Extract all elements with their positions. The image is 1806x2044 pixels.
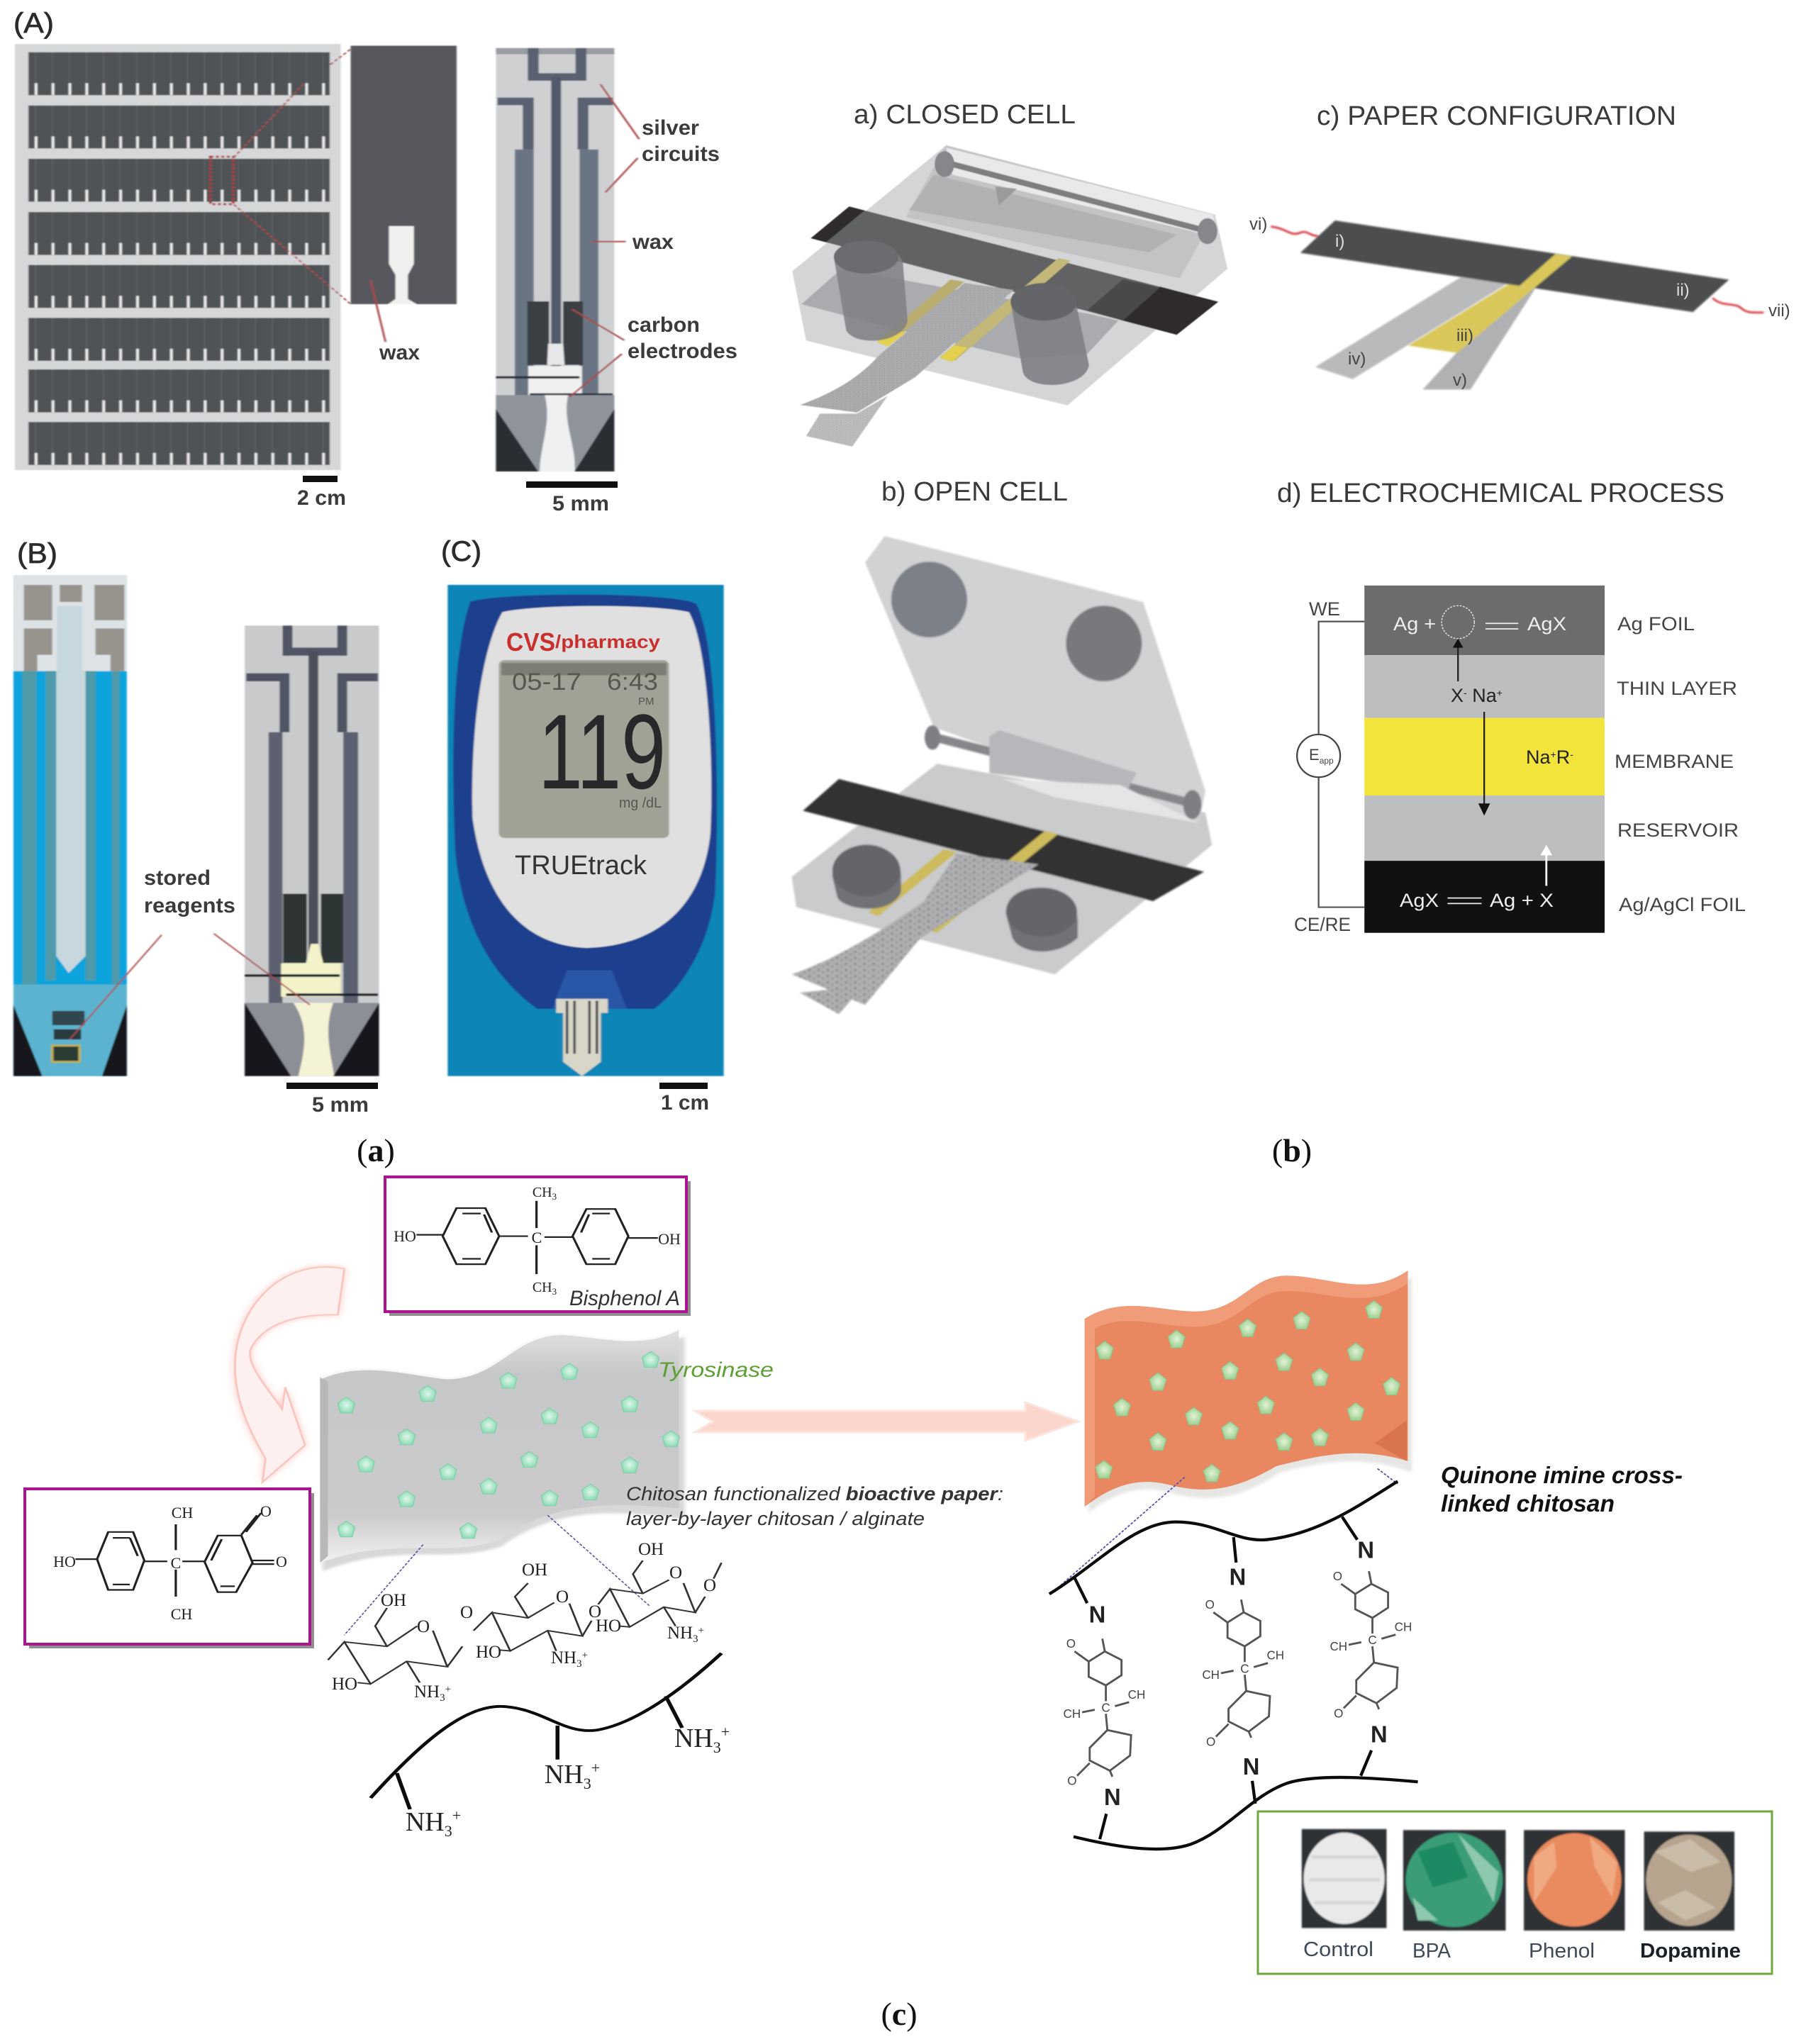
panel: quinone structure box: O	[276, 1553, 287, 1570]
upper chitosan chain	[1049, 1481, 1398, 1603]
linker 1: CH	[1128, 1687, 1145, 1702]
part labels: vii)	[1768, 301, 1790, 320]
panel: bisphenol A structure box: 3	[552, 1286, 557, 1297]
chitosan backbone with amine groups: 3	[445, 1822, 452, 1840]
scale bar: 1 cm: 1 cm	[661, 1091, 709, 1115]
label: Bisphenol A: Bisphenol A	[569, 1287, 680, 1310]
layer labels	[1615, 613, 1746, 915]
label: chitosan functionalized bioactive paper: Chitosan functionalized bioactive paper :	[626, 1483, 1003, 1504]
electrode labels: WE	[1309, 598, 1340, 620]
sample: BPA	[1403, 1830, 1505, 1931]
part labels	[1249, 215, 1790, 390]
sample: control	[1302, 1829, 1386, 1928]
nitrogen labels: N	[1243, 1753, 1259, 1780]
part labels: vi)	[1249, 215, 1267, 234]
reaction labels: -	[1570, 749, 1573, 760]
meter brand: /pharmacy	[555, 631, 661, 652]
curved pink arrow	[235, 1267, 345, 1482]
reaction labels: Na	[1526, 747, 1551, 768]
reaction labels: Ag +	[1393, 613, 1436, 635]
part labels: i)	[1335, 232, 1344, 251]
chitosan chain structure	[328, 1540, 722, 1704]
reaction labels: Na	[1467, 685, 1498, 706]
panel: magnified wax inset: wax	[379, 341, 420, 364]
chitosan chain structure: OH	[381, 1591, 406, 1610]
panel label (C): (C)	[441, 536, 481, 567]
chitosan backbone with amine groups: NH	[545, 1760, 584, 1789]
label: carbon electrodes: electrodes	[628, 340, 737, 363]
sample labels	[1303, 1938, 1741, 1962]
electrode labels: E	[1309, 746, 1320, 764]
scale bar: 2 cm: 2 cm	[297, 486, 346, 510]
layer labels: Ag/AgCl FOIL	[1619, 894, 1746, 915]
chitosan backbone with amine groups: 3	[713, 1738, 721, 1756]
chitosan chain structure: O	[556, 1587, 569, 1607]
label: stored reagents: stored	[144, 866, 211, 890]
linker 3: C	[1368, 1633, 1377, 1647]
reaction labels: +	[1551, 749, 1556, 760]
panel: quinone structure box: HO	[53, 1553, 76, 1570]
chitosan chain structure: O	[669, 1563, 682, 1582]
reaction labels: -	[1464, 687, 1467, 698]
heading: d) electrochemical process: d) ELECTROCHEMICAL PROCESS	[1277, 479, 1724, 508]
linker 3: CH	[1330, 1639, 1347, 1653]
sample labels: Dopamine	[1640, 1940, 1741, 1962]
nitrogen labels: N	[1089, 1601, 1105, 1627]
meter display date and time: 6:43	[607, 669, 658, 696]
chitosan chain structure: HO	[596, 1616, 621, 1636]
diagram: paper configuration	[1249, 215, 1790, 390]
label: chitosan functionalized bioactive paper: layer-by-layer chitosan / alginate	[626, 1508, 925, 1529]
meter brand	[506, 627, 661, 881]
label: quinone imine cross-linked chitosan	[1441, 1462, 1683, 1517]
chitosan chain structure: NH	[551, 1648, 576, 1668]
enzyme particles	[1096, 1300, 1400, 1482]
panel: bisphenol A structure box	[385, 1177, 691, 1316]
chitosan backbone with amine groups: +	[452, 1806, 461, 1824]
panel: quinone structure box: CH	[171, 1605, 192, 1623]
chitosan chain structure: HO	[332, 1675, 357, 1694]
panel: wax-printed sheet of strips	[15, 44, 351, 470]
panel: quinone structure box: CH	[172, 1504, 193, 1521]
diagram: closed cell	[792, 145, 1227, 447]
heading: a) closed cell: a) CLOSED CELL	[854, 100, 1076, 130]
label: carbon electrodes: carbon	[628, 313, 700, 337]
chitosan chain structure: 3	[693, 1633, 698, 1645]
panel: blue wax-printed strip	[13, 576, 162, 1076]
chitosan chain structure: +	[445, 1684, 451, 1695]
linker 2: O	[1205, 1597, 1215, 1612]
chitosan chain structure: NH	[414, 1682, 440, 1702]
caption (c): (c)	[881, 1996, 918, 2032]
linker 1: O	[1066, 1636, 1076, 1651]
linker 3: O	[1333, 1569, 1342, 1583]
label: silver circuits	[642, 116, 720, 166]
layer labels: Ag FOIL	[1617, 613, 1695, 635]
meter display date and time	[512, 669, 658, 708]
layer labels: RESERVOIR	[1617, 820, 1739, 841]
reaction labels: R	[1556, 747, 1570, 768]
chitosan chain structure: O	[703, 1576, 716, 1595]
diagram: open cell	[792, 536, 1212, 1014]
scale bar: 5 mm lower: 5 mm	[312, 1093, 369, 1117]
sample labels: BPA	[1412, 1940, 1451, 1962]
chitosan chain structure: 3	[576, 1658, 582, 1670]
chitosan chain structure: HO	[476, 1643, 501, 1662]
chitosan chain structure: +	[698, 1625, 704, 1636]
sample: dopamine	[1644, 1831, 1734, 1931]
linker 1: CH	[1064, 1707, 1081, 1721]
chitosan chain structure: O	[417, 1617, 430, 1636]
panel: bisphenol A structure box: C	[532, 1229, 542, 1246]
chitosan chain structure: O	[460, 1603, 473, 1622]
label: chitosan functionalized bioactive paper	[626, 1483, 1003, 1529]
reaction labels: X	[1451, 685, 1464, 706]
panel: bisphenol A structure box: OH	[658, 1230, 681, 1248]
label: silver circuits: silver	[642, 116, 699, 140]
reaction labels: AgX	[1527, 613, 1566, 635]
heading: c) paper configuration: c) PAPER CONFIGURATION	[1317, 101, 1676, 131]
meter display date and time: 05-17	[512, 669, 581, 696]
panel: quinone structure box: C	[171, 1554, 181, 1572]
chitosan backbone with amine groups	[371, 1653, 730, 1840]
label: stored reagents: reagents	[144, 894, 235, 917]
linker 3: O	[1334, 1706, 1343, 1720]
nitrogen labels	[1089, 1536, 1388, 1810]
panel: glucose meter photo	[447, 585, 724, 1076]
meter reading 119: 119	[538, 692, 666, 811]
layer labels: MEMBRANE	[1615, 751, 1734, 772]
lower chitosan chain	[1074, 1750, 1418, 1849]
electrode labels: CE/RE	[1294, 914, 1351, 935]
chitosan backbone with amine groups: NH	[674, 1724, 713, 1753]
sample: phenol	[1524, 1830, 1625, 1931]
chitosan backbone with amine groups: +	[721, 1723, 730, 1741]
panel: orange cross-linked paper	[1085, 1270, 1683, 1517]
chitosan chain structure: OH	[638, 1540, 664, 1559]
scale bar: 5 mm top: 5 mm	[552, 492, 609, 515]
label: carbon electrodes	[628, 313, 737, 363]
chitosan chain structure: OH	[522, 1560, 547, 1580]
diagram: electrochemical cell	[1294, 586, 1746, 935]
linker 2: CH	[1266, 1648, 1284, 1663]
caption (b): (b)	[1272, 1132, 1312, 1168]
layer labels: THIN LAYER	[1617, 678, 1737, 699]
scale bar: 2 cm	[297, 476, 346, 510]
nitrogen labels: N	[1357, 1536, 1374, 1563]
layers and circuit	[1297, 586, 1605, 933]
panel label (B): (B)	[17, 538, 57, 569]
label: silver circuits: circuits	[642, 143, 720, 166]
linker 1: O	[1067, 1773, 1077, 1788]
panel: bisphenol A structure box: CH	[533, 1280, 552, 1295]
meter unit: mg /dL	[619, 795, 662, 811]
part labels: v)	[1453, 371, 1467, 390]
panel: magnified wax inset	[351, 45, 457, 364]
panel: quinone structure box	[25, 1489, 314, 1648]
heading: b) open cell: b) OPEN CELL	[881, 477, 1068, 507]
linker 2: C	[1240, 1661, 1249, 1675]
part labels: ii)	[1676, 281, 1690, 300]
label: stored reagents	[144, 866, 235, 917]
panel label (A): (A)	[13, 8, 54, 39]
linker 2: O	[1206, 1734, 1215, 1748]
meter display date and time: PM	[638, 696, 654, 708]
panel: single printed strip with labels	[496, 48, 737, 471]
nitrogen labels: N	[1230, 1563, 1246, 1590]
part labels: iii)	[1456, 326, 1473, 345]
reaction labels: Ag + X	[1490, 890, 1554, 911]
chitosan chain structure: O	[589, 1602, 601, 1621]
nitrogen labels: N	[1104, 1784, 1121, 1810]
part labels: iv)	[1348, 350, 1366, 369]
meter brand: CVS	[506, 627, 555, 657]
electrode labels: app	[1320, 756, 1334, 766]
chitosan backbone with amine groups: NH	[406, 1807, 445, 1837]
reaction labels	[1393, 613, 1573, 911]
label: quinone imine cross-linked chitosan: Quinone imine cross-	[1441, 1462, 1683, 1488]
panel: bisphenol A structure box: 3	[552, 1191, 557, 1202]
caption (a): (a)	[357, 1132, 395, 1168]
chitosan chain structure: 3	[440, 1692, 445, 1704]
linker 1	[1064, 1636, 1145, 1788]
linker 2	[1202, 1597, 1284, 1748]
sample labels: Phenol	[1529, 1940, 1595, 1962]
linker 3	[1330, 1569, 1412, 1720]
chitosan chain structure: +	[582, 1650, 588, 1661]
scale bar: 5 mm top	[526, 481, 618, 515]
chitosan backbone with amine groups: 3	[584, 1775, 591, 1792]
label: Tyrosinase: Tyrosinase	[658, 1358, 774, 1382]
scale bar: 5 mm lower	[286, 1083, 378, 1117]
cross-linked chitosan structure	[1049, 1468, 1418, 1849]
panel: quinone structure box: O	[260, 1502, 272, 1520]
panel: bisphenol A structure box: HO	[394, 1227, 416, 1245]
panel: gray chitosan bioactive paper	[320, 1327, 1003, 1635]
electrode labels	[1294, 598, 1351, 935]
panel: test results box	[1258, 1811, 1772, 1974]
meter brand: TRUEtrack	[515, 851, 647, 881]
linker 3: CH	[1395, 1620, 1412, 1634]
tyrosinase particles	[338, 1351, 679, 1538]
sample labels: Control	[1303, 1938, 1373, 1961]
label: quinone imine cross-linked chitosan: linked chitosan	[1441, 1490, 1615, 1517]
straight pink arrow	[695, 1402, 1078, 1441]
nitrogen labels: N	[1371, 1721, 1388, 1747]
linker 1: C	[1101, 1700, 1110, 1714]
panel: strip with stored reagents	[144, 625, 379, 1076]
reaction labels: +	[1497, 687, 1503, 698]
linker 2: CH	[1202, 1668, 1220, 1682]
panel: bisphenol A structure box: CH	[533, 1185, 552, 1200]
chitosan backbone with amine groups: +	[591, 1759, 600, 1777]
label: wax: wax	[632, 230, 674, 254]
reaction labels: AgX	[1400, 890, 1439, 911]
chitosan chain structure: NH	[667, 1624, 693, 1643]
